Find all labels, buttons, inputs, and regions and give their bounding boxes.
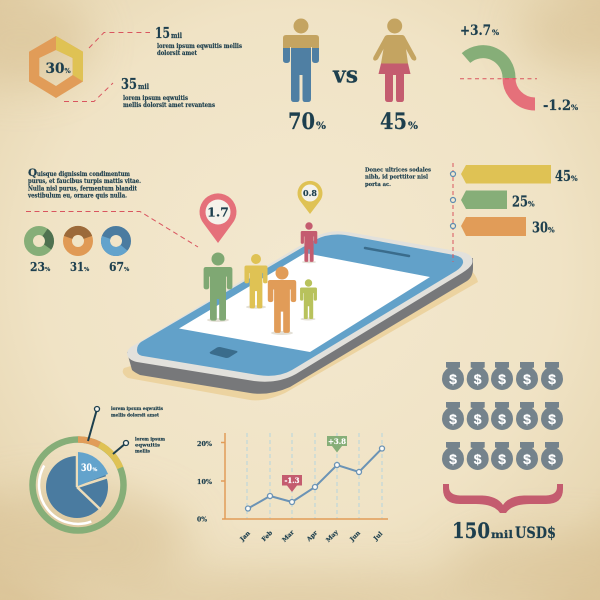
text block: Quisque: uisque dignissim condimentum (37, 171, 130, 178)
bar: 25%: 25 (512, 194, 528, 210)
phone screen (137, 235, 463, 376)
figure: lime person (300, 279, 317, 320)
flag: -1.3: -1.3 (284, 476, 300, 485)
total: 150 mil USD$: USD$ (515, 523, 556, 542)
text block: inner callout: lorem ipsum (135, 436, 165, 442)
figure: orange person (268, 266, 296, 335)
y axis labels: 20% (197, 440, 213, 448)
bar: 30% (461, 217, 555, 236)
data points (246, 446, 384, 511)
text block: Donec (365, 168, 432, 188)
donut: 23%: 23 (30, 260, 45, 274)
pointer: inner callout (113, 440, 128, 454)
flag: +3.8: +3.8 (328, 437, 346, 446)
donut: 67%: % (124, 267, 130, 273)
s-curve chart: -1.2 (543, 98, 571, 114)
money bags row 3 (442, 442, 563, 470)
text block: Donec: porta ac. (365, 182, 391, 188)
hexagon chart: % (64, 67, 72, 75)
phone shadow (123, 270, 478, 400)
bar: 45%: 45 (555, 168, 571, 185)
s-curve chart: +3.7 (460, 23, 491, 39)
bar: 45% (461, 165, 578, 185)
total: 150 mil USD$: 150 (452, 518, 490, 543)
dollar signs: $ (523, 411, 531, 427)
money bags row 2 (442, 402, 563, 430)
text block: outer callout: mellis dolorsit amet (111, 412, 160, 418)
icon: female figure (373, 18, 416, 102)
month labels (238, 528, 385, 544)
s-curve chart (460, 23, 578, 114)
month labels: Apr (305, 529, 320, 544)
dollar signs: $ (449, 371, 457, 387)
line chart (197, 433, 388, 544)
ring and pie chart (32, 439, 124, 530)
dollar signs: $ (498, 411, 506, 427)
dollar signs: $ (548, 451, 556, 467)
dollar signs: $ (548, 371, 556, 387)
donut: 31%: 31 (70, 260, 84, 274)
month labels: May (325, 529, 340, 544)
text block: Quisque: Nulla nisl purus, fermentum blandit (28, 186, 137, 192)
month labels: Jul (372, 530, 385, 543)
bar: 30%: 30 (532, 220, 548, 236)
y axis labels (197, 440, 213, 524)
text block: 15 mil: 15 (155, 25, 170, 42)
text block: Quisque: vestibulum eu, ornare quis nulla. (27, 192, 127, 200)
money bags grid (442, 362, 563, 470)
text block: 15 mil (155, 25, 243, 57)
value: 70%: % (316, 120, 326, 132)
hexagon chart (29, 36, 83, 98)
dollar signs: $ (498, 451, 506, 467)
flag: -1.3 (282, 475, 302, 492)
donut: 31%: % (84, 267, 90, 273)
text block: outer callout: lorem ipsum eqwuitis (111, 406, 163, 412)
dollar signs: $ (449, 451, 457, 467)
dashed connector: 35 mil (64, 83, 113, 102)
text block: 15 mil: mil (171, 31, 182, 40)
curly brace (443, 484, 563, 513)
bar: 25%: % (528, 200, 535, 208)
map pin: 0.8 (298, 181, 322, 214)
text block: 35 mil (121, 76, 216, 109)
ring and pie chart: 30 (81, 463, 92, 474)
month labels: Mar (281, 528, 296, 544)
dollar signs: $ (474, 371, 482, 387)
donut: 31% (68, 230, 90, 274)
text block: inner callout: eqwuitis (135, 442, 160, 448)
text block: Donec: Donec ultrices sodales (365, 168, 432, 174)
bar: 25% (461, 190, 535, 210)
dollar signs: $ (474, 411, 482, 427)
dashed connector: 15 mil (89, 32, 150, 48)
home button (210, 347, 238, 358)
bar: 45%: % (571, 174, 578, 183)
text block: Quisque: purus, et faucibus turpis mattis vitae. (28, 178, 141, 185)
donut: 23%: % (45, 267, 51, 273)
hexagon chart: 30 (46, 61, 64, 77)
map pin: 1.7 (199, 193, 236, 243)
text block: inner callout: mellis (135, 448, 150, 454)
donut: 67%: 67 (109, 260, 124, 274)
s-curve chart: % (571, 103, 578, 112)
donut: 67% (105, 230, 130, 274)
vs label: vs (332, 62, 358, 88)
bar: 30%: % (548, 226, 555, 234)
text block: 15 mil: lorem ipsum eqwuitis mellis (157, 43, 243, 50)
bar chart (450, 163, 578, 262)
flag: +3.8 (327, 436, 347, 452)
text block: 35 mil: mil (138, 82, 149, 91)
text block: outer callout (111, 406, 163, 418)
donut: 23% (28, 230, 51, 274)
dollar signs: $ (523, 451, 531, 467)
total: 150 mil USD$ (452, 518, 556, 543)
data line (248, 448, 382, 508)
map pin: 0.8: 0.8 (303, 188, 317, 198)
y axis labels: 0% (197, 516, 208, 524)
dollar signs: $ (548, 411, 556, 427)
text block: 35 mil: mellis dolorsit amet revantens (123, 102, 216, 109)
text block: 35 mil: 35 (121, 76, 137, 93)
value: 45%: % (408, 120, 418, 132)
phone illustration (123, 231, 478, 400)
map pin: 1.7: 1.7 (207, 204, 229, 220)
figure: yellow person (244, 254, 268, 309)
dollar signs: $ (474, 451, 482, 467)
dollar signs: $ (449, 411, 457, 427)
text block: inner callout (135, 436, 165, 454)
text block: Quisque: Q (28, 167, 37, 179)
dollar signs: $ (523, 371, 531, 387)
month labels: Feb (261, 530, 274, 543)
icon: male figure (283, 18, 319, 102)
total: 150 mil USD$: mil (491, 529, 513, 541)
pointer: outer callout (88, 406, 100, 441)
text block: 15 mil: dolorsit amet (157, 50, 197, 57)
month labels: Jan (238, 530, 252, 543)
figure: red person (301, 222, 317, 263)
s-curve chart: % (492, 28, 499, 37)
speaker (365, 248, 409, 256)
money bags row 1 (442, 362, 563, 390)
figure: green person (204, 252, 232, 322)
text block: Quisque (27, 167, 141, 200)
dollar signs: $ (498, 371, 506, 387)
dollar signs (449, 371, 556, 467)
value: 45%: 45 (380, 109, 407, 135)
value: 70%: 70 (288, 109, 315, 135)
text block: 35 mil: lorem ipsum eqwuitis (123, 95, 189, 102)
month labels: Jun (348, 529, 362, 544)
text block: Donec: nibh, id porttitor nisl (365, 174, 429, 180)
ring and pie chart: % (92, 467, 98, 473)
axes (221, 433, 388, 519)
phone display (179, 253, 430, 352)
phone bezel (127, 231, 473, 382)
y axis labels: 10% (197, 478, 213, 486)
phone body (127, 258, 473, 394)
dashed connector to pin (26, 212, 198, 247)
gridlines (247, 433, 382, 519)
